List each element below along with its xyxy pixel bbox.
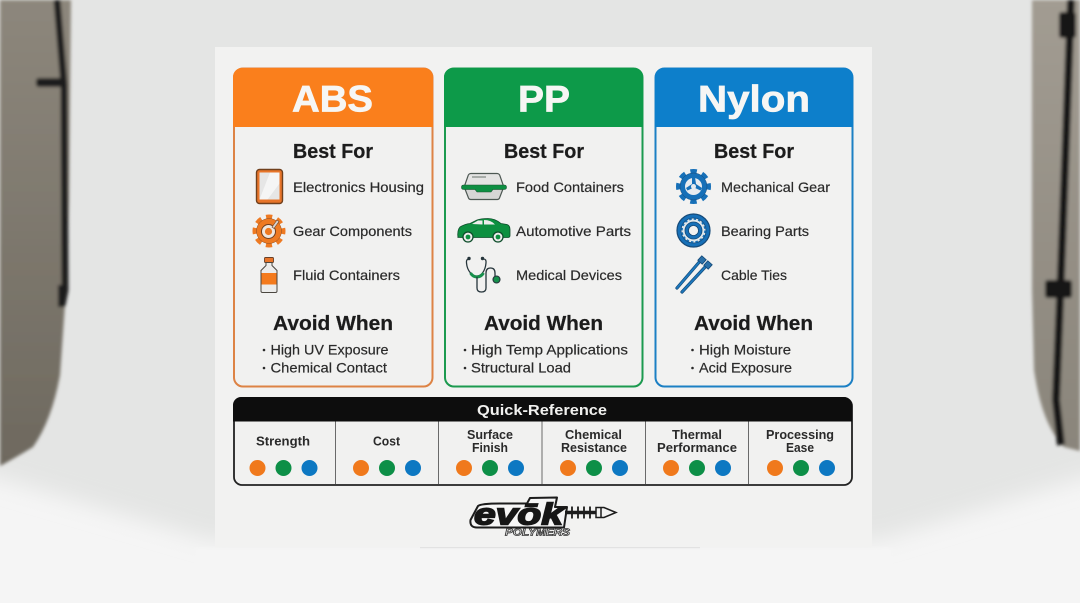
Medical Devices label: Medical Devices: [516, 267, 622, 283]
quick reference header: [233, 397, 852, 422]
column: Surface Finish: Finish: [472, 441, 508, 455]
column: Chemical Resistance: [560, 428, 628, 476]
column: Thermal Performance: Performance: [657, 441, 737, 455]
reference board: [215, 47, 872, 548]
ABS avoid list: [263, 342, 389, 376]
column: Strength: Strength: [256, 434, 310, 448]
Nylon avoid list: Acid Exposure: [699, 360, 792, 376]
PP best for heading: Best For: [504, 141, 584, 163]
Nylon avoid when heading: Avoid When: [694, 313, 813, 335]
Mechanical Gear label: Mechanical Gear: [721, 179, 830, 195]
Bearing Parts label: Bearing Parts: [721, 223, 809, 239]
column: Surface Finish: [456, 428, 524, 476]
icon: mechanical gear: [678, 172, 708, 202]
Fluid Containers label: Fluid Containers: [293, 267, 400, 283]
column: Thermal Performance: Thermal: [672, 428, 722, 442]
icon: car: [458, 218, 510, 242]
panel: quick reference: [233, 397, 852, 485]
column: Chemical Resistance: Resistance: [561, 441, 627, 455]
PP avoid list: [464, 342, 628, 376]
PP avoid list: Structural Load: [471, 360, 571, 376]
icon: bottle: [261, 258, 277, 292]
column: Processing Ease: Ease: [786, 441, 814, 455]
Nylon avoid list: [691, 342, 792, 376]
icon: cable ties: [677, 256, 712, 292]
PP avoid list: High Temp Applications: [471, 342, 628, 358]
Electronics Housing label: Electronics Housing: [293, 179, 424, 195]
column: Surface Finish: Surface: [467, 428, 513, 442]
column: Cost: Cost: [373, 434, 401, 448]
icon: bearing: [677, 214, 710, 247]
Nylon avoid list: High Moisture: [699, 342, 791, 358]
Nylon best for heading: Best For: [714, 141, 794, 163]
column: Processing Ease: Processing: [766, 428, 834, 442]
ABS avoid list: Chemical Contact: [270, 360, 387, 376]
Cable Ties label: Cable Ties: [721, 267, 787, 283]
icon: stethoscope: [466, 257, 500, 292]
left studio wall and stand: [0, 0, 71, 466]
ABS avoid list: High UV Exposure: [270, 342, 389, 358]
logo: evok polymers: POLYMERS: [505, 526, 570, 538]
icon: gear: [255, 217, 283, 245]
ABS avoid when heading: Avoid When: [273, 313, 393, 335]
logo drill bit: [565, 506, 616, 518]
column: Cost: [353, 434, 421, 476]
quick reference title: Quick-Reference: [477, 402, 607, 419]
Automotive Parts label: Automotive Parts: [516, 223, 631, 239]
logo: evok polymers: [470, 496, 616, 538]
Nylon header: [655, 68, 853, 127]
column: Thermal Performance: [657, 428, 737, 476]
ABS title: ABS: [292, 78, 373, 120]
icon: tablet: [256, 170, 282, 204]
logo: evok polymers: evōk: [474, 496, 565, 532]
icon: food container: [462, 173, 506, 200]
right studio wall and stand: [1032, 0, 1080, 451]
column: Chemical Resistance: Chemical: [565, 428, 622, 442]
PP avoid when heading: Avoid When: [484, 313, 603, 335]
ABS header: [233, 68, 433, 127]
panel: PP: [444, 68, 643, 386]
Nylon title: Nylon: [698, 78, 810, 120]
column: Processing Ease: [766, 428, 835, 476]
panel: Nylon: [655, 68, 853, 386]
column: Strength: [250, 434, 318, 476]
panel: ABS: [233, 68, 433, 386]
Food Containers label: Food Containers: [516, 179, 624, 195]
PP title: PP: [518, 78, 570, 120]
ABS best for heading: Best For: [293, 141, 373, 163]
PP header: [444, 68, 643, 127]
Gear Components label: Gear Components: [293, 223, 412, 239]
